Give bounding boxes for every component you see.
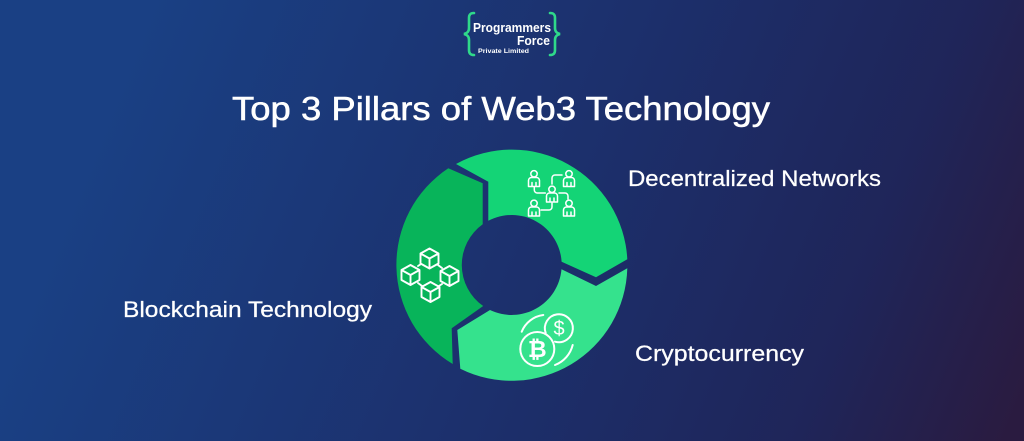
- title: Top 3 Pillars of Web3 Technology: [232, 90, 771, 127]
- icon: crypto coins: [520, 314, 573, 366]
- arc bottom right: [555, 345, 573, 365]
- person top right: [564, 171, 574, 186]
- dollar sign: $: [553, 318, 565, 340]
- cube left: [402, 265, 420, 285]
- segment: cryptocurrency: [457, 268, 627, 381]
- dollar coin: [545, 314, 573, 342]
- logo wordmark line 2: Force: [517, 33, 550, 48]
- logo tagline: Private Limited: [478, 48, 529, 55]
- logo left brace: [464, 13, 474, 55]
- label: Cryptocurrency: Cryptocurrency: [635, 341, 804, 366]
- person center: [546, 186, 558, 202]
- cube bottom: [422, 282, 440, 302]
- bitcoin coin: [520, 332, 554, 366]
- donut chart: [396, 150, 627, 381]
- person bottom left: [528, 200, 540, 216]
- logo right brace: [550, 13, 560, 55]
- cube right: [440, 266, 458, 286]
- bitcoin sign: ₿: [528, 336, 547, 362]
- person top left: [528, 171, 540, 186]
- logo wordmark line 1: Programmers: [473, 20, 551, 35]
- arc top left: [522, 315, 543, 332]
- label: Blockchain Technology: Blockchain Technology: [123, 297, 372, 322]
- person bottom right: [564, 200, 574, 216]
- segment: blockchain technology: [396, 168, 483, 364]
- cube top: [420, 248, 438, 268]
- segment: decentralized networks: [456, 150, 627, 277]
- network connectors: [534, 175, 568, 210]
- logo: Programmers Force: [464, 13, 560, 55]
- label: Decentralized Networks: Decentralized Networks: [628, 166, 881, 191]
- cube links: [418, 264, 442, 286]
- icon: blockchain cubes: [402, 248, 458, 302]
- icon: network of people: [528, 171, 574, 216]
